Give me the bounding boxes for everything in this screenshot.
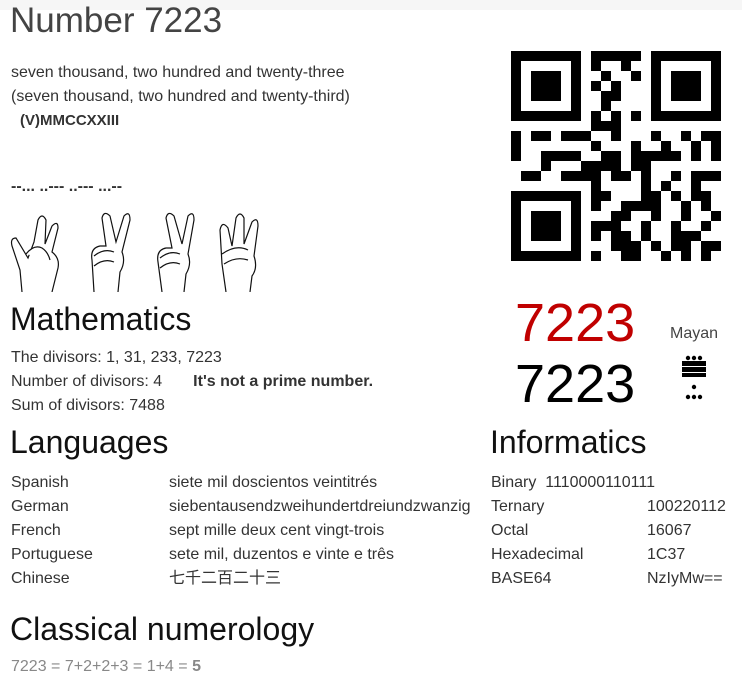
table: informatics: 100220112 [647, 498, 726, 515]
table: informatics: Binary 1110000110111 [491, 474, 655, 491]
big number black: 7223 [515, 354, 635, 414]
heading: Classical numerology: Classical numerology [10, 611, 314, 647]
text block: math facts [11, 349, 373, 414]
table: languages: Portuguese [11, 546, 93, 563]
table: informatics: Octal [491, 522, 528, 539]
table: languages: French [11, 522, 61, 539]
big number red: 7223 [515, 293, 635, 353]
table: informatics: Ternary [491, 498, 544, 515]
text block: names: seven thousand, two hundred and twenty-three [11, 64, 345, 81]
heading: Mathematics: Mathematics [10, 301, 191, 337]
text block: math facts: Number of divisors: 4 It's not a prime number. [11, 373, 373, 390]
table: informatics: Hexadecimal [491, 546, 583, 563]
title: Number 7223 [10, 1, 222, 40]
table: languages: sept mille deux cent vingt-trois [169, 522, 384, 539]
text block: math facts: Sum of divisors: 7488 [11, 397, 165, 414]
heading: Languages: Languages [10, 424, 168, 460]
table: languages: Chinese [11, 570, 70, 587]
table: languages: siebentausendzweihundertdreiundzwanzig [169, 498, 471, 515]
icon: mayan numeral [682, 356, 706, 400]
table: informatics: 1C37 [647, 546, 685, 563]
text block: numerology: 7223 = 7+2+2+3 = 1+4 = 5 [11, 658, 201, 675]
text block: names: (seven thousand, two hundred and twenty-third) [11, 88, 350, 105]
table: languages [11, 474, 471, 587]
mayan label: Mayan [670, 325, 718, 342]
table: languages: sete mil, duzentos e vinte e três [169, 546, 394, 563]
table: informatics: BASE64 [491, 570, 551, 587]
text block: names [11, 64, 350, 129]
qr code [511, 51, 721, 261]
table: informatics: 16067 [647, 522, 692, 539]
morse code: --... ..--- ..--- ...-- [11, 178, 122, 195]
table: languages: 七千二百二十三 [169, 570, 281, 587]
text block: math facts: The divisors: 1, 31, 233, 7223 [11, 349, 222, 366]
table: languages: Spanish [11, 474, 69, 491]
icon: sign language hands [10, 212, 259, 292]
table: informatics [491, 474, 726, 587]
text block: names: (V)MMCCXXIII [20, 112, 119, 129]
table: informatics: NzIyMw== [647, 570, 723, 587]
table: languages: German [11, 498, 69, 515]
heading: Informatics: Informatics [490, 424, 646, 460]
table: languages: siete mil doscientos veintitrés [169, 474, 377, 491]
